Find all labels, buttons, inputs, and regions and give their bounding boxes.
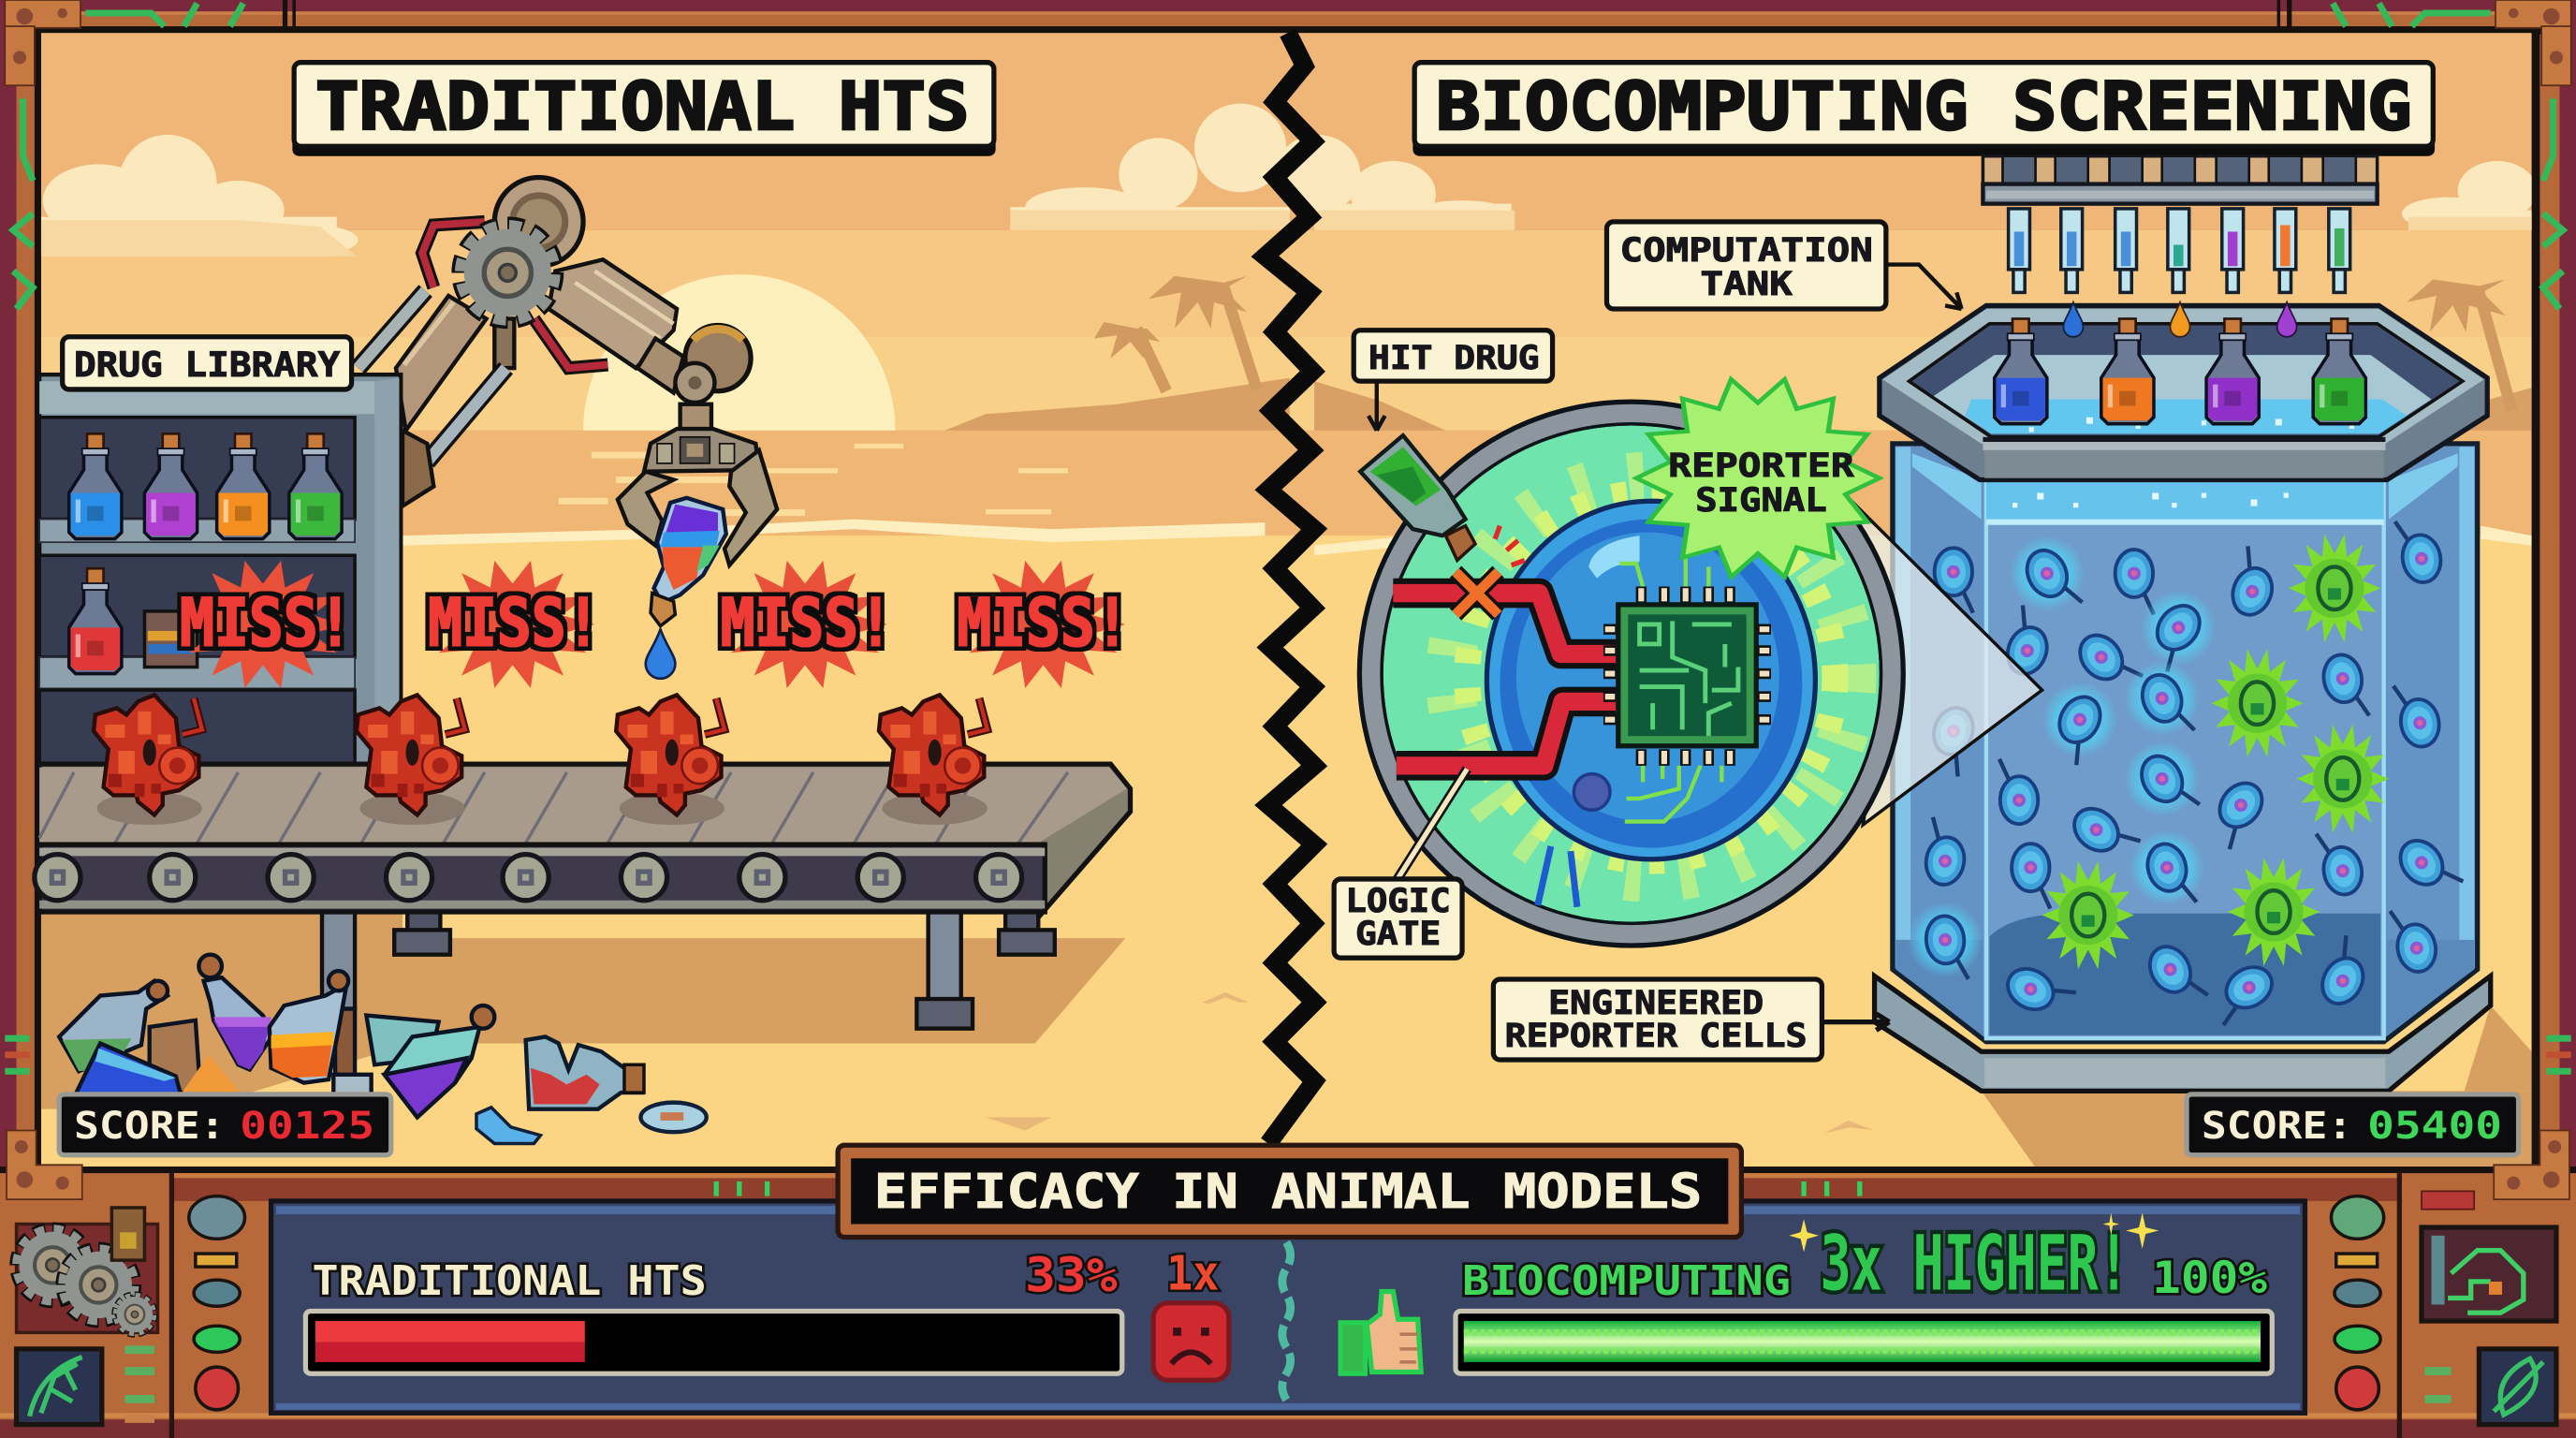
- label: drug library: [63, 337, 352, 389]
- score panel: traditional: [59, 1094, 391, 1155]
- callout: 3x higher: 3x HIGHER!: [1821, 1221, 2130, 1309]
- score panel: traditional: 00125: [240, 1104, 374, 1148]
- biocomputing efficacy bar: 100%: [2152, 1253, 2268, 1304]
- label: engineered reporter cells: REPORTER CELLS: [1505, 1017, 1808, 1055]
- frame ornaments: corners and green wires: [5, 0, 2571, 1075]
- corner plates: [7, 1130, 82, 1199]
- label: computation tank: [1606, 222, 1886, 309]
- logic gate red pipes: [1393, 594, 1617, 654]
- left console buttons: [189, 1196, 245, 1410]
- liquid droplet: [646, 629, 675, 679]
- icon: thumbs up: [1340, 1291, 1421, 1373]
- label: computation tank: TANK: [1701, 265, 1793, 303]
- label: hit drug: [1354, 330, 1553, 381]
- drug library shelf: [39, 374, 401, 766]
- biocomputing efficacy bar: [1456, 1253, 2272, 1373]
- microchip: [1603, 587, 1771, 766]
- blocked gate x: [1456, 572, 1499, 614]
- island and palms: [944, 378, 2532, 431]
- hit drug vial: [1360, 435, 1525, 565]
- arrow: computation tank: [1888, 265, 1962, 309]
- label: logic gate: GATE: [1355, 915, 1441, 953]
- bottom console: [0, 1130, 2576, 1438]
- reporter signal burst: SIGNAL: [1695, 481, 1827, 520]
- back gear: [494, 178, 583, 266]
- tank body: [1893, 444, 2478, 1042]
- upper arm: [549, 259, 677, 368]
- magnifier lens: logic circuit in a cell: [1357, 399, 1906, 948]
- efficacy banner: [838, 1145, 1741, 1238]
- miss burst 2: [428, 561, 600, 688]
- clouds: [41, 104, 2537, 257]
- traditional efficacy bar: [305, 1248, 1122, 1373]
- miss burst 3: [721, 561, 893, 688]
- row of bottles: [69, 433, 122, 539]
- falling droplets: [2063, 302, 2297, 337]
- score panel: biocomputing: [2187, 1094, 2519, 1155]
- efficacy banner: EFFICACY IN ANIMAL MODELS: [874, 1165, 1702, 1220]
- vials in tank: [1995, 318, 2047, 424]
- miss burst 1: MISS!: [180, 585, 352, 662]
- arrow: logic gate: [1397, 769, 1467, 881]
- failed bottle heap: [59, 955, 494, 1117]
- label: logic gate: LOGIC: [1345, 882, 1451, 920]
- miss burst 2: MISS!: [428, 585, 600, 662]
- label: engineered reporter cells: ENGINEERED: [1548, 984, 1764, 1022]
- label: logic gate: [1334, 879, 1462, 958]
- magnifier beam: [1850, 500, 2042, 825]
- tank rim: [1880, 305, 2487, 479]
- sun: [583, 274, 896, 431]
- arrow: reporter cells: [1823, 1014, 1889, 1030]
- robot arm: [359, 178, 777, 565]
- title: traditional hts: TRADITIONAL HTS: [315, 68, 970, 145]
- biocomputing efficacy bar: BIOCOMPUTING: [1462, 1257, 1791, 1305]
- title: biocomputing screening: [1412, 63, 2435, 156]
- main navy panel: [271, 1201, 2305, 1413]
- icon: sad face: [1153, 1303, 1229, 1380]
- arrow: hit drug: [1368, 383, 1385, 431]
- broken red flask: [526, 1036, 644, 1109]
- right console buttons: [2331, 1196, 2384, 1410]
- label: engineered reporter cells: [1493, 979, 1822, 1060]
- background beach scene: [41, 33, 2537, 1177]
- label: drug library: DRUG LIBRARY: [74, 345, 341, 385]
- shadow under conveyor: [41, 912, 1125, 1109]
- score panel: traditional: SCORE:: [74, 1104, 225, 1148]
- traditional efficacy bar: 33%: [1025, 1248, 1118, 1303]
- score panel: biocomputing: SCORE:: [2202, 1104, 2352, 1148]
- conveyor belt: [35, 764, 1131, 1029]
- status ticks: [716, 1181, 1860, 1196]
- sand marks: [987, 992, 1874, 1134]
- miss burst 1: [180, 561, 352, 688]
- held drug bottle: [651, 498, 726, 626]
- zigzag divider: [1265, 33, 1314, 1143]
- miss burst 4: MISS!: [957, 585, 1130, 662]
- title: traditional hts: [292, 63, 996, 156]
- title: biocomputing screening: BIOCOMPUTING SCREENING: [1436, 68, 2411, 145]
- cell body: [1486, 501, 1815, 859]
- miss burst 4: [957, 561, 1130, 688]
- 1x multiplier: 1x: [1166, 1247, 1219, 1302]
- score panel: biocomputing: 05400: [2367, 1104, 2502, 1148]
- center divider: [1282, 1242, 1291, 1400]
- label: hit drug: HIT DRUG: [1368, 339, 1540, 377]
- traditional efficacy bar: TRADITIONAL HTS: [312, 1257, 707, 1305]
- tank base: [1875, 976, 2491, 1091]
- label: computation tank: COMPUTATION: [1620, 231, 1873, 270]
- glass shards: [476, 1103, 707, 1143]
- right console screens: [2422, 1191, 2556, 1425]
- reporter signal burst: REPORTER: [1668, 447, 1855, 485]
- engineered reporter cells: [1904, 515, 2463, 1026]
- callout: 3x higher: [1789, 1212, 2159, 1309]
- pipette array: [1983, 156, 2378, 292]
- computation tank: [1875, 305, 2491, 1091]
- reporter signal burst: [1636, 379, 1880, 577]
- target tumor cells on belt: [94, 695, 988, 825]
- left console gears and screen: [17, 1208, 157, 1425]
- shadow under tank: [1982, 1091, 2532, 1170]
- miss burst 3: MISS!: [721, 585, 893, 662]
